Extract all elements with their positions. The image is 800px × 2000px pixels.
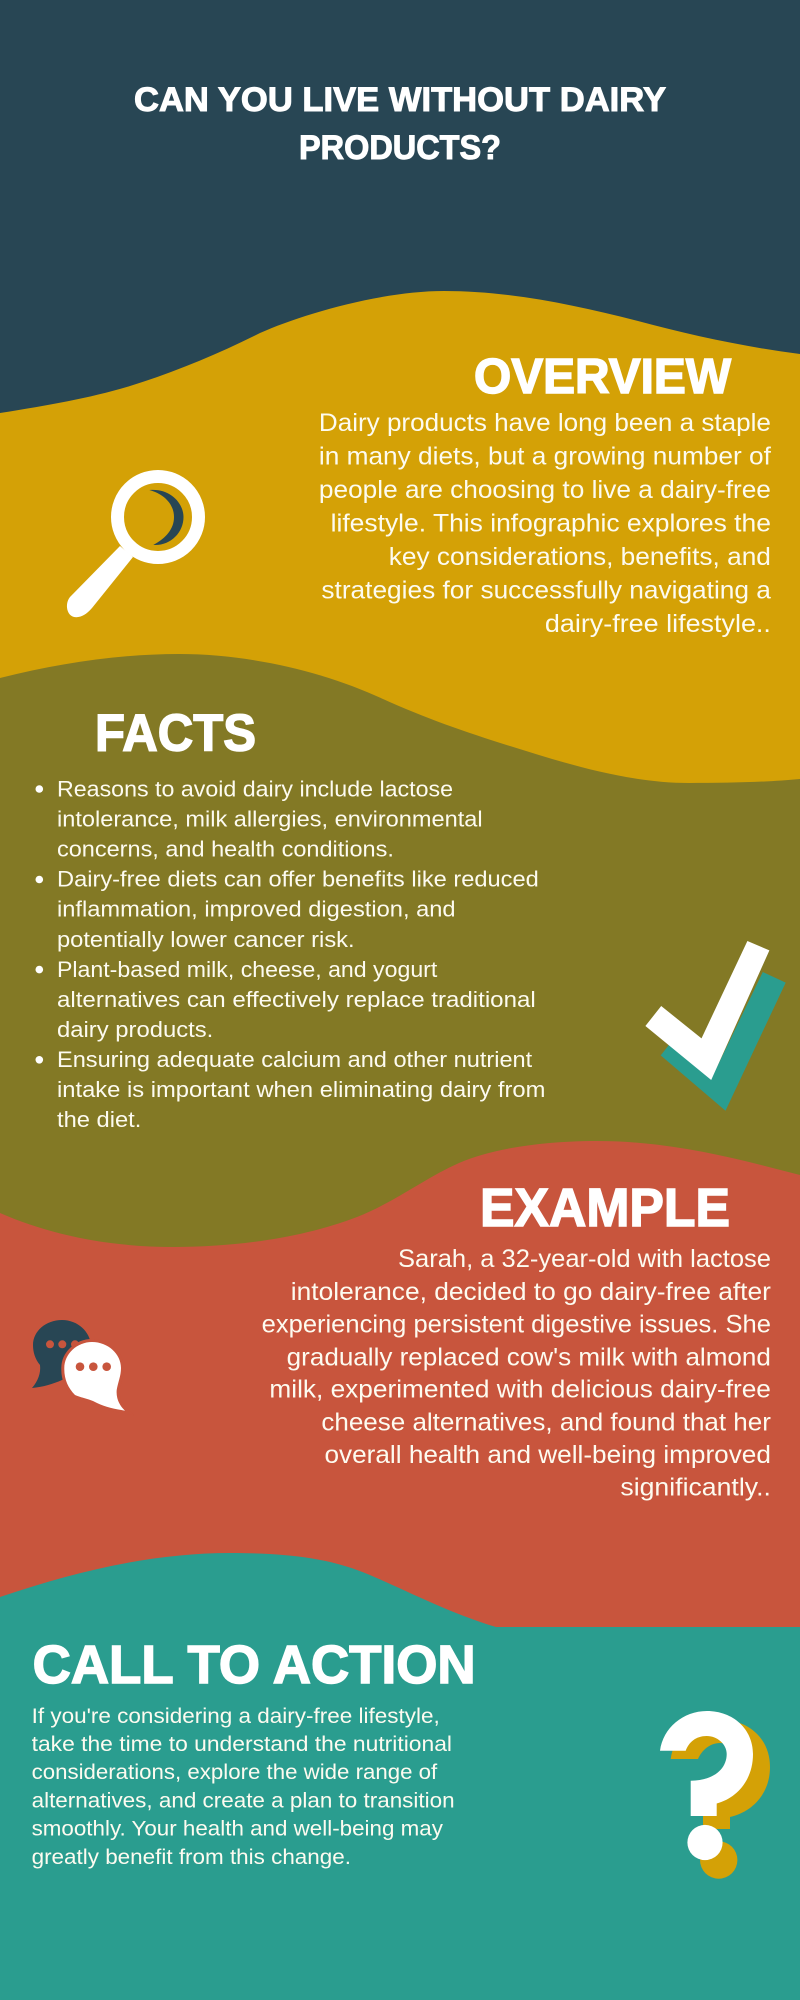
icon: speech bubbles [32,1320,125,1411]
wave background: overview [0,291,800,800]
text block: call to action: greatly benefit from this change. [32,1846,351,1869]
text block: call to action: alternatives, and create a plan to transition [32,1790,455,1813]
text block: example: intolerance, decided to go dairy-free after [291,1278,771,1306]
wave background: facts [0,654,800,1250]
text block: example: gradually replaced cow's milk with almond [287,1344,771,1372]
text block: call to action [32,1705,455,1869]
text block: example: milk, experimented with delicious dairy-free [269,1376,771,1404]
bullet list: facts: inflammation, improved digestion, and [57,897,456,922]
text block: call to action: If you're considering a dairy-free lifestyle, [32,1705,440,1728]
text block: example: Sarah, a 32-year-old with lactose [398,1245,771,1273]
panel: overview [0,291,800,800]
icon: magnifying glass [67,476,198,617]
text block: overview: in many diets, but a growing number of [319,442,771,470]
text block: example: cheese alternatives, and found that her [321,1408,771,1436]
wave background: call to action [0,1553,800,2000]
text block: call to action: take the time to understand the nutritional [32,1733,452,1756]
heading: call to action: CALL TO ACTION [33,1635,476,1695]
heading: example: EXAMPLE [480,1178,730,1238]
panel: example [0,1141,800,1640]
text block: example: experiencing persistent digestive issues. She [262,1310,771,1338]
text block: overview: key considerations, benefits, and [389,543,771,571]
text block: overview: lifestyle. This infographic explores the [331,510,771,538]
bullet list: facts: alternatives can effectively replace traditional [57,987,536,1012]
bullet list: facts: Dairy-free diets can offer benefits like reduced [57,867,539,892]
text block: call to action: considerations, explore the wide range of [32,1761,437,1784]
title: PRODUCTS? [299,129,501,167]
wave background: example [0,1141,800,1640]
title [134,81,666,167]
bullet list: facts [36,776,545,1132]
bullet list: facts: intake is important when eliminating dairy from [57,1077,545,1102]
bullet list: facts: the diet. [57,1107,141,1132]
text block: example: significantly.. [620,1474,771,1502]
icon: check mark [645,941,786,1111]
bullet list: facts: dairy products. [57,1017,213,1042]
heading: overview: OVERVIEW [474,350,732,404]
text block: overview: dairy-free lifestyle.. [545,610,771,638]
bullet list: facts: Plant-based milk, cheese, and yogurt [57,957,437,982]
bullet list: facts: concerns, and health conditions. [57,837,394,862]
title: CAN YOU LIVE WITHOUT DAIRY [134,81,666,119]
text block: overview [319,409,771,638]
panel: title header [0,0,800,420]
text block: overview: people are choosing to live a dairy-free [319,476,771,504]
icon: question mark [660,1711,770,1879]
text block: overview: Dairy products have long been a staple [319,409,771,437]
bullet list: facts: Ensuring adequate calcium and other nutrient [57,1047,532,1072]
text block: call to action: smoothly. Your health and well-being may [32,1818,443,1841]
text block: example: overall health and well-being improved [324,1441,771,1469]
panel: facts [0,654,800,1250]
heading: facts: FACTS [95,704,256,762]
text block: overview: strategies for successfully navigating a [321,576,771,604]
text block: example [262,1245,771,1502]
panel: call to action [0,1553,800,2000]
bullet list: facts: potentially lower cancer risk. [57,927,355,952]
bullet list: facts: intolerance, milk allergies, environmental [57,806,483,832]
bullet list: facts: Reasons to avoid dairy include lactose [57,776,453,801]
